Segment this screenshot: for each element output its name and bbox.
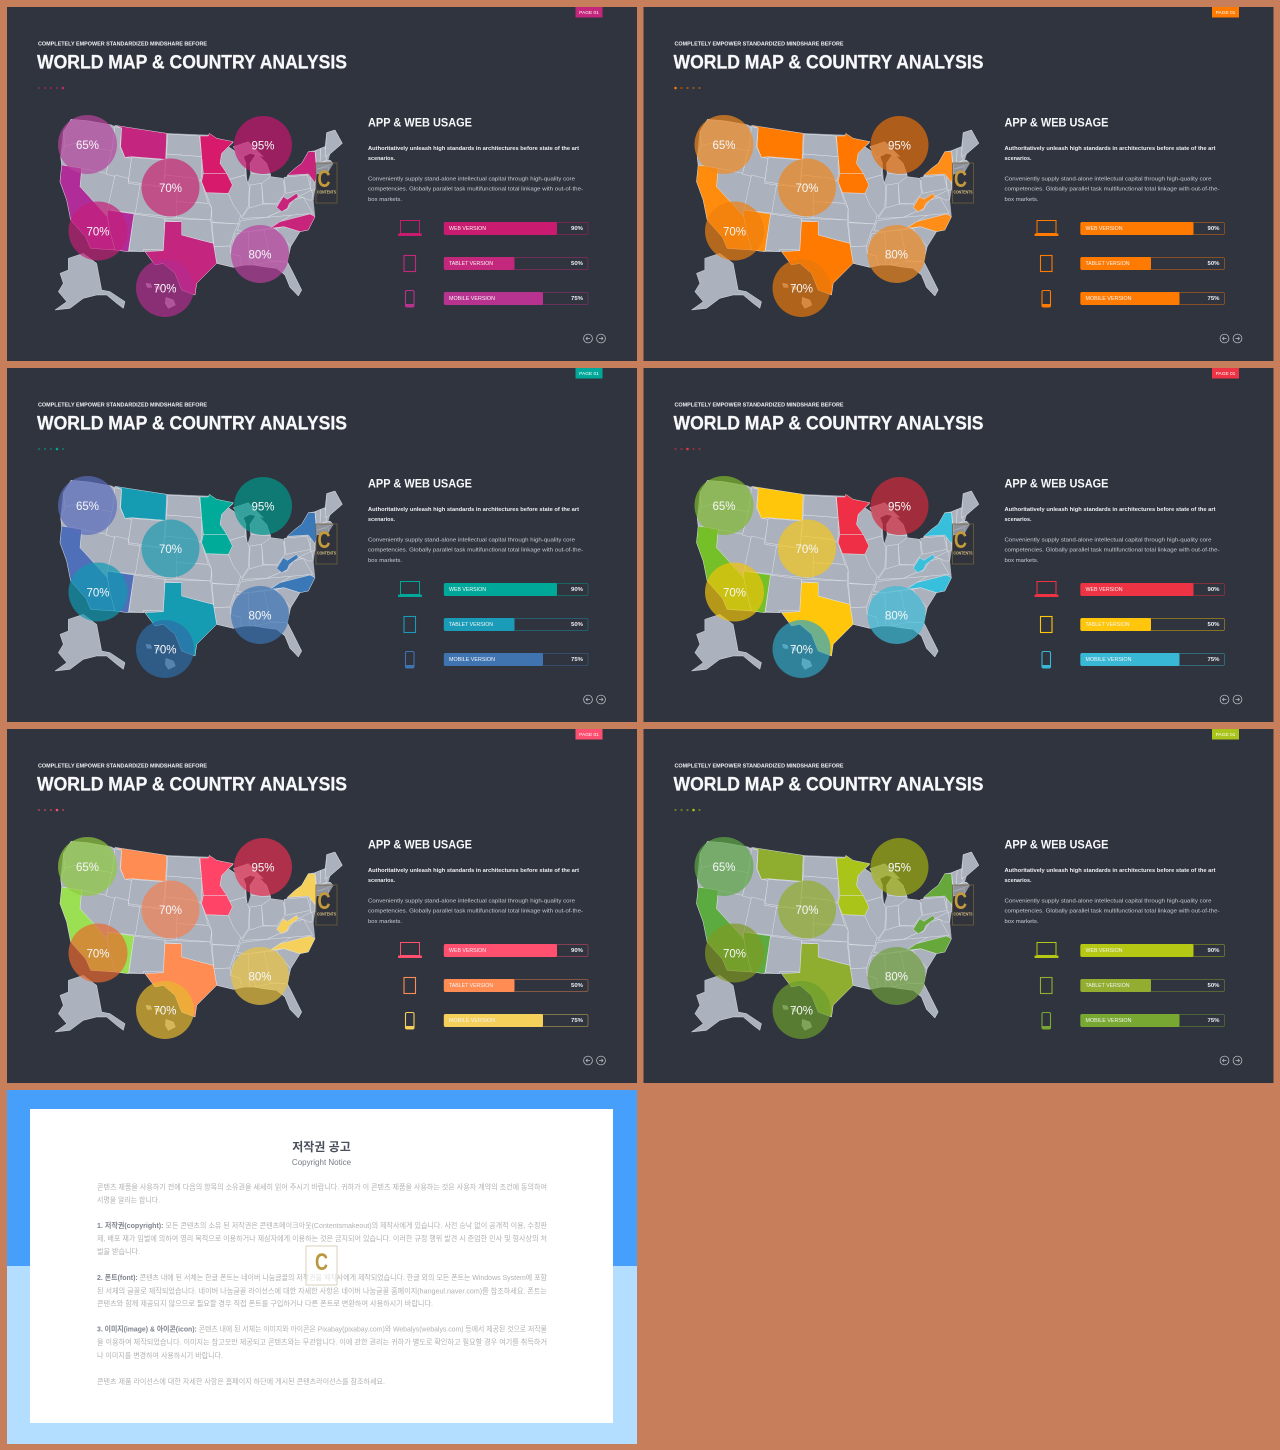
bar: web version: 90% (1208, 587, 1220, 593)
bold paragraph: scenarios. (1004, 517, 1032, 523)
bold paragraph: Authoritatively unleash high standards in architectures before state of the art (368, 507, 579, 513)
panel: copyright notice (7, 1090, 637, 1444)
bar: mobile version: MOBILE VERSION (1086, 1018, 1132, 1024)
bar: mobile version: 75% (571, 296, 583, 302)
icon: phone (1042, 1012, 1050, 1029)
kicker text: COMPLETELY EMPOWER STANDARDIZED MINDSHARE BEFORE (674, 764, 844, 770)
circle 95% (870, 116, 928, 174)
navigation arrows (584, 1056, 605, 1065)
icon: laptop (398, 582, 422, 597)
bar: mobile version (444, 292, 588, 305)
pagination dots (674, 87, 701, 89)
icon: laptop (1034, 220, 1058, 236)
circle 65%: 65% (76, 140, 99, 152)
bold paragraph (1004, 507, 1216, 523)
US map (691, 841, 979, 1032)
bar: mobile version: 75% (571, 657, 583, 663)
panel: green slide (644, 729, 1274, 1083)
bar: web version: 90% (571, 587, 583, 593)
circle 95%: 95% (888, 862, 911, 874)
body paragraph: box markets. (368, 558, 403, 564)
navigation arrows (584, 695, 605, 704)
navigation arrows (1220, 1056, 1242, 1065)
US map (55, 841, 342, 1032)
notice clause 1: 1. 저작권(copyright): 모든 콘텐츠의 소유 된 저작권은 콘텐츠메이크아웃(Contentsmakeout)의 제작사에게 있습니다. 사전 승낙 없이 공개적 이용, 수정판 (97, 1221, 547, 1230)
bar: web version: WEB VERSION (1086, 587, 1123, 593)
page tag (1212, 729, 1239, 740)
title: WORLD MAP & COUNTRY ANALYSIS (674, 414, 984, 434)
page tag (1212, 368, 1239, 378)
bold paragraph: scenarios. (368, 156, 395, 162)
icon: laptop (398, 220, 422, 236)
bar: tablet version (444, 257, 588, 270)
bar: tablet version (1080, 618, 1224, 631)
bar: tablet version: TABLET VERSION (449, 622, 493, 628)
bar: web version: WEB VERSION (449, 226, 486, 232)
icon: tablet (1040, 978, 1052, 994)
circle 95% (234, 838, 292, 896)
logo watermark (316, 524, 337, 564)
page tag: PAGE 01 (579, 10, 599, 16)
circle 80%: 80% (885, 250, 908, 262)
pagination dots (674, 809, 701, 811)
bar: tablet version: TABLET VERSION (1086, 622, 1130, 628)
body paragraph: competencies. Globally parallel task multifunctional total linkage with out-of-the- (1004, 548, 1220, 554)
circle 80%: 80% (248, 972, 272, 984)
circle 70% west: 70% (723, 226, 746, 238)
bar: web version: 90% (571, 948, 583, 954)
bar: mobile version: MOBILE VERSION (1086, 296, 1132, 302)
bold paragraph (368, 868, 579, 884)
pagination dots (38, 87, 64, 89)
title: WORLD MAP & COUNTRY ANALYSIS (37, 414, 347, 434)
circle 80% (868, 225, 926, 283)
circle 70% west: 70% (86, 948, 110, 960)
kicker text: COMPLETELY EMPOWER STANDARDIZED MINDSHARE BEFORE (674, 402, 844, 408)
circle 70% center: 70% (159, 905, 182, 917)
title: WORLD MAP & COUNTRY ANALYSIS (674, 52, 984, 74)
panel: multicolour red-yellow slide (644, 368, 1274, 722)
notice clause 2: 콘텐츠와 함께 제공되지 않으므로 필요할 경우 직접 폰트를 구입하거나 다른 폰트로 변환하여 사용하시기 바랍니다. (97, 1299, 433, 1308)
notice clause 2: 된 서체의 글꼴로 제작되었습니다. 네이버 나눔글꼴 라이선스에 대한 자세한 사항은 네이버 나눔글꼴 홈페이지(hangeul.naver.com)를 참조하세요. 폰트는 (97, 1286, 547, 1296)
body paragraph: box markets. (1004, 558, 1039, 564)
bold paragraph: scenarios. (368, 517, 395, 523)
notice clause 2: 2. 폰트(font): 콘텐츠 내에 된 서체는 한글 폰트는 네이버 나눔글꼴의 저작권을 제작사에게 제작되었습니다. 한글 외의 모든 폰트는 Windows System에 포함 (97, 1273, 547, 1282)
bold paragraph (1004, 868, 1216, 884)
circle 95%: 95% (251, 502, 275, 514)
circle 80%: 80% (248, 250, 272, 262)
notice clause 2 (97, 1273, 547, 1308)
body paragraph: box markets. (1004, 919, 1039, 925)
notice subheading: Copyright Notice (292, 1158, 352, 1167)
icon: tablet (404, 978, 416, 994)
notice closing line: 콘텐츠 제품 라이선스에 대한 자세한 사항은 홈페이지 하단에 게시된 콘텐츠라이선스를 참조하세요. (97, 1377, 385, 1386)
icon: tablet (404, 256, 416, 272)
body paragraph (368, 176, 583, 203)
bar: tablet version: TABLET VERSION (449, 983, 493, 989)
circle 70% west: 70% (86, 588, 110, 600)
logo watermark (316, 163, 337, 203)
bar: mobile version (1080, 653, 1224, 666)
circle 70% south: 70% (153, 644, 177, 656)
body paragraph: competencies. Globally parallel task multifunctional total linkage with out-of-the- (368, 186, 583, 192)
circle 65% (58, 115, 117, 174)
pagination dots (38, 809, 64, 811)
logo watermark (952, 885, 974, 925)
bar: tablet version: 50% (571, 261, 583, 267)
bar: tablet version: 50% (1208, 983, 1220, 989)
logo watermark: C (315, 1249, 328, 1276)
circle 65% (58, 837, 117, 896)
circle 70% south: 70% (790, 1006, 813, 1018)
circle 70% south: 70% (153, 284, 177, 296)
notice clause 1: 벌을 받습니다. (97, 1247, 140, 1256)
body paragraph: Conveniently supply stand-alone intellectual capital through high-quality core (1004, 176, 1212, 182)
circle 65% (694, 115, 754, 174)
circle 70% center: 70% (159, 183, 182, 195)
notice clause 3: 3. 이미지(image) & 아이콘(icon): 콘텐츠 내에 된 서체는 이미지와 아이콘은 Pixabay(pixabay.com)와 Webalys(webalys.com) 등에서 제공된 것으로 저작물 (97, 1324, 547, 1334)
navigation arrows (1220, 334, 1242, 343)
bar: web version: 90% (571, 226, 583, 232)
body paragraph: Conveniently supply stand-alone intellectual capital through high-quality core (368, 176, 575, 182)
page tag: PAGE 01 (1216, 10, 1236, 16)
bar: tablet version: TABLET VERSION (1086, 983, 1130, 989)
notice clause 3: 나 이미지를 변경하여 사용하시기 바랍니다. (97, 1351, 223, 1360)
notice clause 3: 을 이용하여 제작되었습니다. 이미지는 참고모만 제공되고 콘텐츠와는 무관합니다. 이에 관한 권리는 귀하가 별도로 확인하고 필요할 경우 여기를 취득하거 (97, 1338, 547, 1346)
title: WORLD MAP & COUNTRY ANALYSIS (37, 774, 347, 796)
bold paragraph: scenarios. (1004, 156, 1032, 162)
kicker text: COMPLETELY EMPOWER STANDARDIZED MINDSHARE BEFORE (38, 42, 207, 48)
circle 70% center: 70% (159, 544, 182, 556)
bar: mobile version (444, 1014, 588, 1027)
circle 80%: 80% (885, 610, 908, 622)
bar: web version: 90% (1208, 226, 1220, 232)
bar: tablet version: 50% (1208, 622, 1220, 628)
body paragraph: competencies. Globally parallel task multifunctional total linkage with out-of-the- (1004, 908, 1220, 914)
page tag (576, 368, 602, 378)
circle 95%: 95% (251, 140, 275, 152)
bold paragraph: Authoritatively unleash high standards in architectures before state of the art (1004, 868, 1216, 874)
page tag (576, 729, 602, 740)
circle 70% center: 70% (795, 183, 819, 195)
icon: tablet (404, 616, 416, 632)
circle 70% west: 70% (723, 588, 746, 600)
page tag (576, 7, 602, 18)
body paragraph (1004, 898, 1220, 925)
icon: phone (406, 1012, 414, 1029)
circle 65% (58, 476, 117, 535)
circle 65%: 65% (76, 862, 99, 874)
pagination dots (38, 448, 64, 450)
bar: mobile version: MOBILE VERSION (1086, 657, 1132, 663)
icon: tablet (1040, 616, 1052, 632)
kicker text: COMPLETELY EMPOWER STANDARDIZED MINDSHARE BEFORE (38, 764, 207, 770)
bar: mobile version: MOBILE VERSION (449, 296, 495, 302)
notice intro: 콘텐츠 제품을 사용하기 전에 다음의 항목의 소유권을 세세히 읽어 주시기 바랍니다. 귀하가 이 콘텐츠 제품을 사용하는 것은 사용자 계약의 조건에 동의하여 (97, 1182, 547, 1192)
bar: web version: WEB VERSION (449, 587, 486, 593)
circle 70% south (136, 620, 194, 678)
circle 95%: 95% (888, 502, 911, 514)
circle 65%: 65% (76, 501, 99, 513)
body paragraph: box markets. (368, 197, 403, 203)
bar: tablet version (1080, 979, 1224, 992)
body paragraph (1004, 176, 1220, 203)
panel: pink-orange slide (7, 729, 637, 1083)
circle 70% west (68, 924, 128, 982)
bar: web version (444, 222, 588, 235)
circle 70% center (778, 520, 836, 578)
bar: mobile version (1080, 1014, 1224, 1027)
US map (55, 119, 342, 310)
circle 65%: 65% (712, 140, 736, 152)
circle 80% (231, 947, 289, 1005)
heading: APP & WEB USAGE (368, 116, 472, 130)
page tag (1212, 7, 1239, 18)
circle 70% south: 70% (790, 284, 813, 296)
bold paragraph: Authoritatively unleash high standards in architectures before state of the art (1004, 146, 1216, 152)
page tag: PAGE 01 (1216, 732, 1236, 738)
circle 70% west (68, 562, 128, 622)
circle 70% center (142, 520, 200, 578)
kicker text: COMPLETELY EMPOWER STANDARDIZED MINDSHARE BEFORE (674, 42, 844, 48)
icon: laptop (398, 942, 422, 958)
circle 80% (868, 586, 926, 644)
circle 70% center (778, 158, 836, 216)
bar: web version: WEB VERSION (1086, 226, 1123, 232)
notice intro (97, 1182, 547, 1204)
bar: web version (1080, 583, 1224, 596)
circle 70% center (142, 880, 200, 938)
circle 70% south (772, 981, 830, 1039)
circle 95%: 95% (251, 862, 275, 874)
circle 70% west (68, 202, 128, 260)
body paragraph: competencies. Globally parallel task multifunctional total linkage with out-of-the- (368, 908, 583, 914)
circle 95% (870, 838, 928, 896)
bar: tablet version: TABLET VERSION (449, 261, 493, 267)
heading: APP & WEB USAGE (1004, 838, 1108, 852)
body paragraph (1004, 538, 1220, 564)
page tag: PAGE 01 (1216, 371, 1236, 377)
bar: web version (444, 944, 588, 957)
logo watermark (306, 1246, 337, 1285)
bar: tablet version (444, 618, 588, 631)
bold paragraph (1004, 146, 1216, 162)
circle 65%: 65% (712, 501, 736, 513)
circle 70% south: 70% (790, 644, 813, 656)
title: WORLD MAP & COUNTRY ANALYSIS (674, 774, 984, 796)
icon: phone (1042, 652, 1050, 668)
circle 80%: 80% (248, 610, 272, 622)
circle 70% center: 70% (795, 905, 819, 917)
body paragraph: box markets. (1004, 197, 1039, 203)
logo watermark (952, 163, 974, 203)
circle 70% west (705, 924, 764, 982)
circle 65%: 65% (712, 862, 736, 874)
logo watermark (316, 885, 337, 925)
US map (691, 119, 979, 310)
body paragraph: Conveniently supply stand-alone intellectual capital through high-quality core (368, 538, 575, 544)
circle 95% (234, 477, 292, 535)
bold paragraph: scenarios. (368, 878, 395, 884)
US map (55, 480, 342, 671)
icon: phone (406, 290, 414, 307)
body paragraph: Conveniently supply stand-alone intellectual capital through high-quality core (1004, 538, 1212, 544)
circle 70% center: 70% (795, 544, 819, 556)
bar: web version: 90% (1208, 948, 1220, 954)
circle 70% south (136, 981, 194, 1039)
circle 70% west (705, 202, 764, 260)
page tag: PAGE 01 (579, 371, 599, 377)
notice intro: 서명을 알리는 합니다. (97, 1196, 160, 1204)
bar: mobile version (444, 653, 588, 666)
notice clause 3 (97, 1324, 547, 1360)
logo watermark (952, 524, 974, 564)
bar: mobile version: MOBILE VERSION (449, 657, 495, 663)
circle 70% south (136, 259, 194, 317)
circle 80% (231, 586, 289, 644)
circle 95% (234, 116, 292, 174)
circle 70% west: 70% (723, 948, 746, 960)
bar: mobile version: 75% (1208, 657, 1220, 663)
bar: tablet version: 50% (571, 983, 583, 989)
body paragraph: Conveniently supply stand-alone intellectual capital through high-quality core (1004, 898, 1212, 904)
circle 95% (870, 477, 928, 535)
circle 65% (694, 476, 754, 535)
bar: mobile version: 75% (571, 1018, 583, 1024)
bar: tablet version: 50% (1208, 261, 1220, 267)
bar: mobile version (1080, 292, 1224, 305)
body paragraph: competencies. Globally parallel task multifunctional total linkage with out-of-the- (368, 548, 583, 554)
US map (691, 480, 979, 671)
heading: APP & WEB USAGE (1004, 476, 1108, 490)
title: WORLD MAP & COUNTRY ANALYSIS (37, 52, 347, 74)
panel: magenta slide (7, 7, 637, 361)
bar: web version: WEB VERSION (1086, 948, 1123, 954)
circle 70% center (142, 158, 200, 216)
panel: orange slide (644, 7, 1274, 361)
bar: tablet version (444, 979, 588, 992)
bar: web version (1080, 222, 1224, 235)
bar: mobile version: 75% (1208, 1018, 1220, 1024)
bold paragraph: Authoritatively unleash high standards in architectures before state of the art (368, 146, 579, 152)
bar: tablet version: TABLET VERSION (1086, 261, 1130, 267)
circle 70% west: 70% (86, 226, 110, 238)
circle 65% (694, 837, 754, 896)
bar: web version (1080, 944, 1224, 957)
circle 70% south: 70% (153, 1006, 177, 1018)
icon: laptop (1034, 942, 1058, 958)
circle 70% south (772, 259, 830, 317)
navigation arrows (584, 334, 605, 343)
body paragraph: box markets. (368, 919, 403, 925)
icon: phone (406, 652, 414, 668)
heading: APP & WEB USAGE (1004, 116, 1108, 130)
bar: mobile version: 75% (1208, 296, 1220, 302)
pagination dots (674, 448, 701, 450)
notice clause 1: 제, 배포 재가 임벌에 의하여 영리 목적으로 이용하거나 제삼자에게 이용하는 것은 금지되어 있습니다. 이러한 규정 행위 발견 시 준엄한 민사 및 형사상의 처 (97, 1234, 547, 1243)
circle 80% (868, 947, 926, 1005)
circle 70% center (778, 880, 836, 938)
heading: APP & WEB USAGE (368, 838, 472, 852)
bold paragraph: scenarios. (1004, 878, 1032, 884)
icon: tablet (1040, 256, 1052, 272)
circle 80% (231, 225, 289, 283)
circle 95%: 95% (888, 140, 911, 152)
body paragraph: Conveniently supply stand-alone intellectual capital through high-quality core (368, 898, 575, 904)
notice heading: 저작권 공고 (292, 1139, 351, 1154)
body paragraph: competencies. Globally parallel task multifunctional total linkage with out-of-the- (1004, 186, 1220, 192)
icon: laptop (1034, 582, 1058, 597)
bar: web version: WEB VERSION (449, 948, 486, 954)
bar: web version (444, 583, 588, 596)
circle 80%: 80% (885, 972, 908, 984)
bold paragraph: Authoritatively unleash high standards in architectures before state of the art (368, 868, 579, 874)
kicker text: COMPLETELY EMPOWER STANDARDIZED MINDSHARE BEFORE (38, 402, 207, 408)
notice clause 1 (97, 1221, 547, 1256)
bar: tablet version: 50% (571, 622, 583, 628)
body paragraph (368, 538, 583, 564)
bold paragraph (368, 507, 579, 523)
bar: tablet version (1080, 257, 1224, 270)
navigation arrows (1220, 695, 1242, 704)
page tag: PAGE 01 (579, 732, 599, 738)
bold paragraph (368, 146, 579, 162)
heading: APP & WEB USAGE (368, 476, 472, 490)
circle 70% south (772, 620, 830, 678)
body paragraph (368, 898, 583, 925)
circle 70% west (705, 562, 764, 622)
icon: phone (1042, 290, 1050, 307)
bold paragraph: Authoritatively unleash high standards in architectures before state of the art (1004, 507, 1216, 513)
panel: teal slide (7, 368, 637, 722)
bar: mobile version: MOBILE VERSION (449, 1018, 495, 1024)
